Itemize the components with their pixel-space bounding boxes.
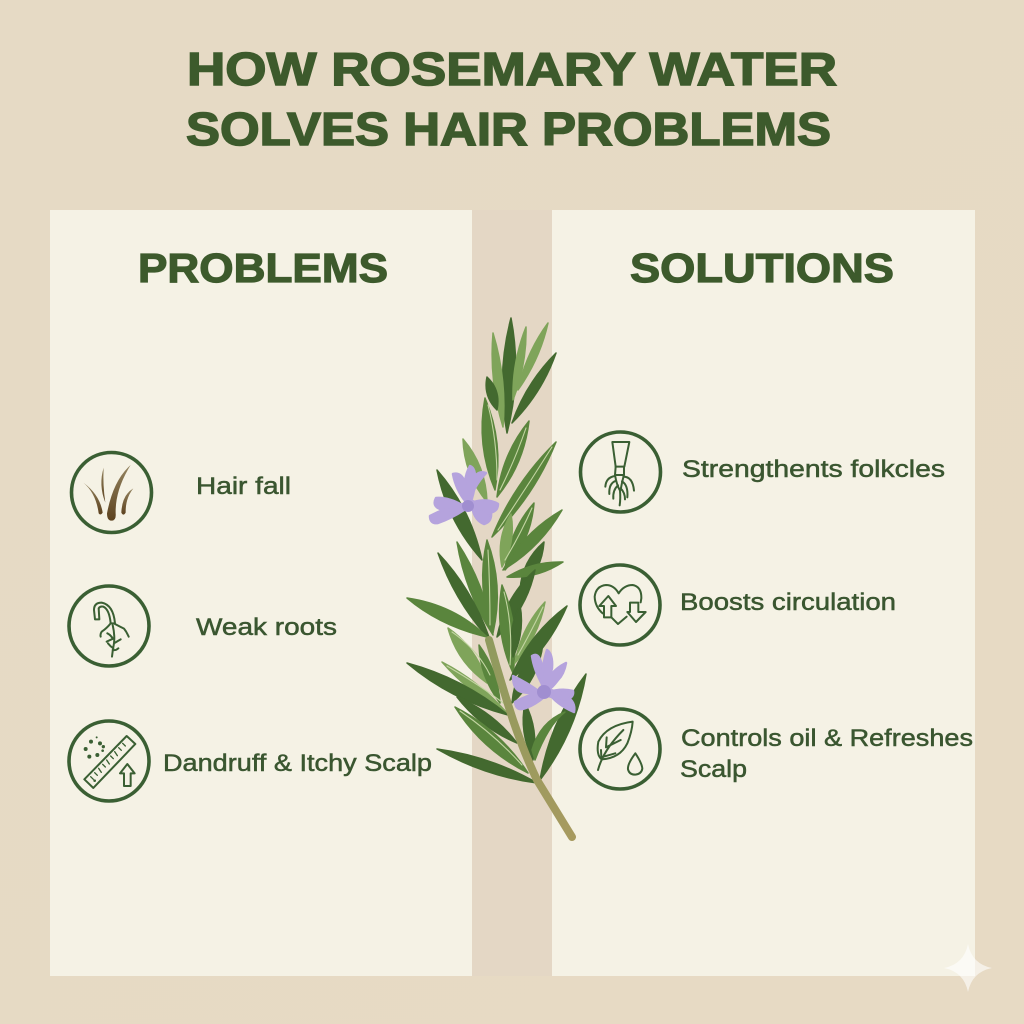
item: hair fall <box>72 452 291 532</box>
panel: problems <box>50 210 472 976</box>
item: dandruff and itchy scalp <box>69 721 432 801</box>
item: weak roots <box>69 586 337 666</box>
heading: problems: PROBLEMS <box>138 245 388 291</box>
item: controls oil and refreshes scalp: Controls oil & Refreshes <box>681 725 973 752</box>
center strip <box>472 210 552 976</box>
panel: solutions <box>552 210 975 976</box>
flower: lower <box>513 650 574 712</box>
item: boosts circulation <box>580 565 896 645</box>
item: controls oil and refreshes scalp <box>580 709 973 789</box>
title: HOW ROSEMARY WATER <box>187 43 837 95</box>
flower: upper <box>430 466 498 524</box>
item: weak roots: Weak roots <box>196 614 337 641</box>
leaves: rosemary <box>407 318 586 783</box>
illustration: rosemary sprig <box>407 318 586 837</box>
item: strengthens follicles: Strengthents folkcles <box>682 456 945 483</box>
title <box>186 43 837 155</box>
item: dandruff and itchy scalp: Dandruff & Itchy Scalp <box>163 750 432 777</box>
title: SOLVES HAIR PROBLEMS <box>186 103 831 155</box>
heading: solutions: SOLUTIONS <box>630 245 894 291</box>
item: strengthens follicles <box>580 432 945 512</box>
sparkle <box>944 944 992 992</box>
item: controls oil and refreshes scalp: Scalp <box>680 756 747 783</box>
stem <box>489 640 572 837</box>
item: hair fall: Hair fall <box>196 473 291 500</box>
item: boosts circulation: Boosts circulation <box>680 589 896 616</box>
